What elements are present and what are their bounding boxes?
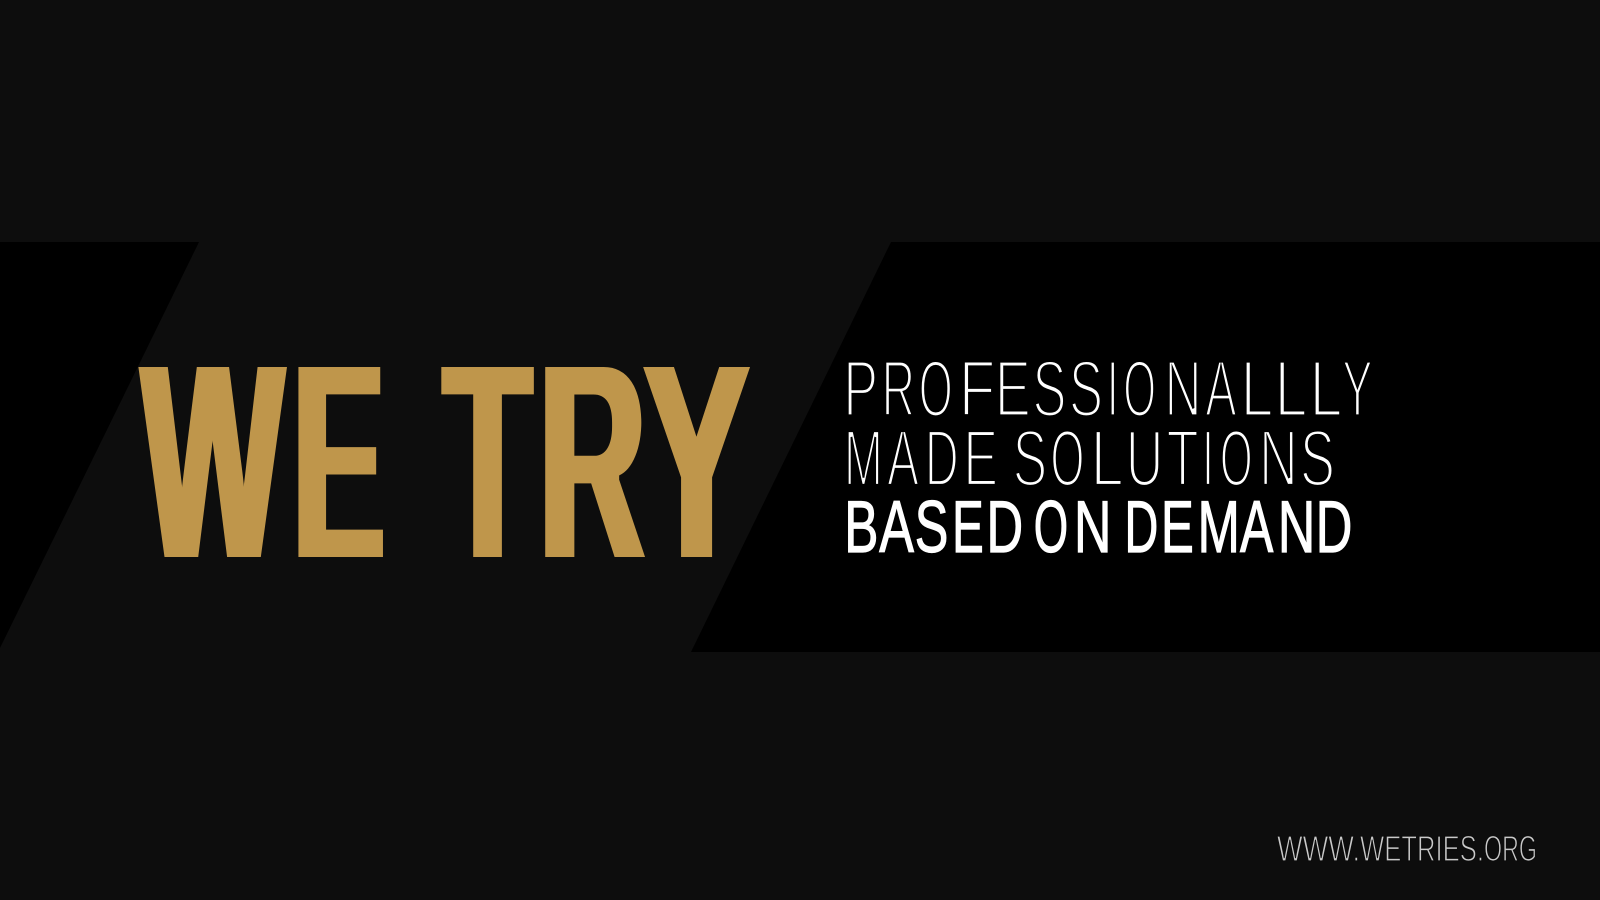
tagline line 1: R (882, 344, 915, 433)
tagline line 3: N (1278, 487, 1315, 568)
tagline line 1: L (1241, 344, 1273, 433)
tagline line 1: O (1123, 344, 1156, 433)
website url: WWW. (1277, 828, 1360, 869)
tagline line 2: M (844, 414, 883, 503)
tagline line 3: D (986, 487, 1023, 568)
tagline line 3: E (1161, 487, 1194, 568)
tagline line 1: S (1069, 344, 1103, 433)
tagline line 3: S (915, 487, 948, 568)
tagline line 2: I (1202, 414, 1214, 503)
tagline line 1: I (1107, 344, 1119, 433)
tagline line 1: S (1032, 344, 1066, 433)
tagline line 3: A (879, 487, 914, 568)
tagline (843, 344, 1373, 568)
right black slanted panel (691, 242, 1600, 652)
tagline line 3: M (1198, 487, 1240, 568)
tagline line 3: D (1124, 487, 1158, 568)
tagline line 1: O (919, 344, 953, 433)
tagline line 3: B (844, 487, 878, 568)
tagline line 3: D (1316, 487, 1352, 568)
tagline line 2: S (1013, 414, 1047, 503)
tagline line 2: L (1091, 414, 1124, 503)
tagline line 1: E (995, 344, 1031, 433)
website url: WETRIES. (1360, 828, 1484, 869)
tagline line 1: F (959, 344, 995, 433)
tagline line 1: L (1275, 344, 1307, 433)
tagline line 1: N (1164, 344, 1202, 433)
tagline line 3: E (952, 487, 984, 568)
heading: WE TRY: T (444, 304, 531, 619)
heading: WE TRY: Y (643, 304, 750, 619)
heading: WE TRY: W (142, 304, 285, 619)
tagline line 1: P (843, 344, 878, 433)
heading: WE TRY: E (293, 304, 384, 619)
tagline line 3: O (1034, 487, 1068, 568)
tagline line 2: E (963, 414, 998, 503)
tagline line 2: N (1259, 414, 1298, 503)
tagline line 2: S (1300, 414, 1335, 503)
tagline line 1: L (1310, 344, 1342, 433)
heading: WE TRY: R (539, 304, 645, 619)
tagline line 2: O (1220, 414, 1253, 503)
tagline line 2: T (1167, 414, 1199, 503)
left black slanted band (0, 242, 199, 648)
tagline line 3: A (1240, 487, 1274, 568)
tagline line 2: A (887, 414, 919, 503)
tagline line 1: A (1205, 344, 1237, 433)
tagline line 1: Y (1342, 344, 1373, 433)
tagline line 2: U (1126, 414, 1163, 503)
website url: ORG (1484, 828, 1537, 869)
tagline line 2: D (925, 414, 959, 503)
tagline line 3: N (1074, 487, 1111, 568)
tagline line 2: O (1050, 414, 1084, 503)
